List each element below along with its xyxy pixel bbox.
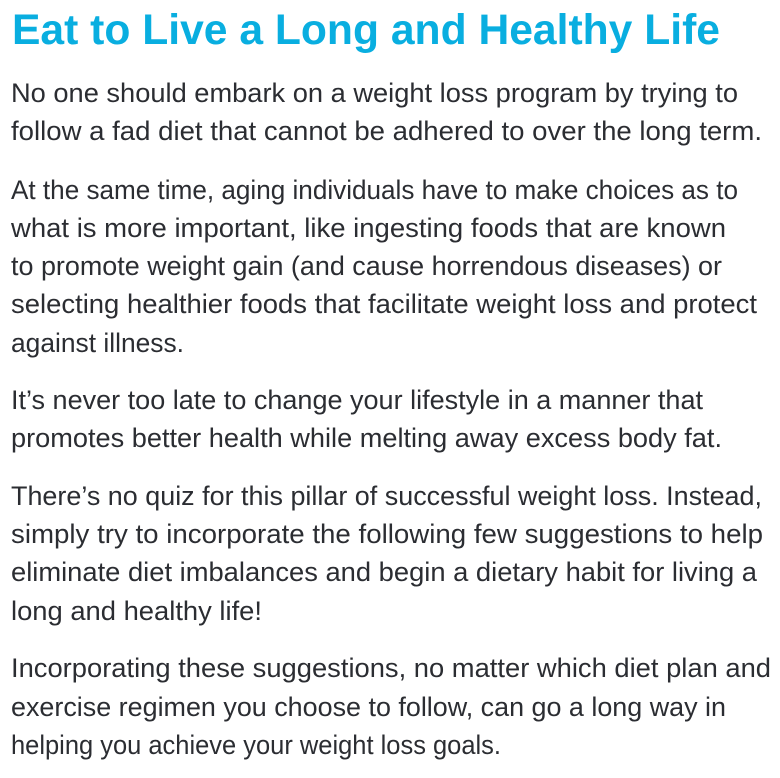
text block: paragraph 5 bbox=[11, 653, 771, 760]
text block: paragraph 2: At the same time, aging individuals have to make choices as to bbox=[11, 175, 738, 205]
text block: paragraph 4: long and healthy life! bbox=[11, 596, 262, 626]
text block: paragraph 4 bbox=[11, 481, 763, 626]
text block: paragraph 4: eliminate diet imbalances and begin a dietary habit for living a bbox=[11, 557, 757, 587]
text block: paragraph 4: There’s no quiz for this pillar of successful weight loss. Instead, bbox=[11, 481, 762, 511]
text block: paragraph 2: to promote weight gain (and cause horrendous diseases) or bbox=[11, 251, 722, 281]
text block: paragraph 1: follow a fad diet that cannot be adhered to over the long term. bbox=[11, 116, 762, 146]
text block: paragraph 2 bbox=[10, 175, 758, 358]
title: Eat to Live a Long and Healthy Life bbox=[12, 7, 720, 54]
text block: paragraph 1 bbox=[11, 78, 762, 146]
text block: paragraph 2: against illness. bbox=[11, 328, 184, 358]
text block: paragraph 3: promotes better health while melting away excess body fat. bbox=[11, 423, 722, 453]
text block: paragraph 3 bbox=[11, 385, 722, 453]
text block: paragraph 5: helping you achieve your weight loss goals. bbox=[11, 730, 501, 760]
text block: paragraph 2: selecting healthier foods that facilitate weight loss and protect bbox=[11, 289, 758, 319]
text block: paragraph 1: No one should embark on a weight loss program by trying to bbox=[11, 78, 738, 108]
text block: paragraph 5: exercise regimen you choose to follow, can go a long way in bbox=[11, 692, 726, 722]
text block: paragraph 5: Incorporating these suggestions, no matter which diet plan and bbox=[11, 653, 771, 683]
text block: paragraph 4: simply try to incorporate the following few suggestions to help bbox=[11, 519, 763, 549]
text block: paragraph 3: It’s never too late to change your lifestyle in a manner that bbox=[11, 385, 704, 415]
text block: paragraph 2: what is more important, like ingesting foods that are known bbox=[10, 213, 726, 243]
